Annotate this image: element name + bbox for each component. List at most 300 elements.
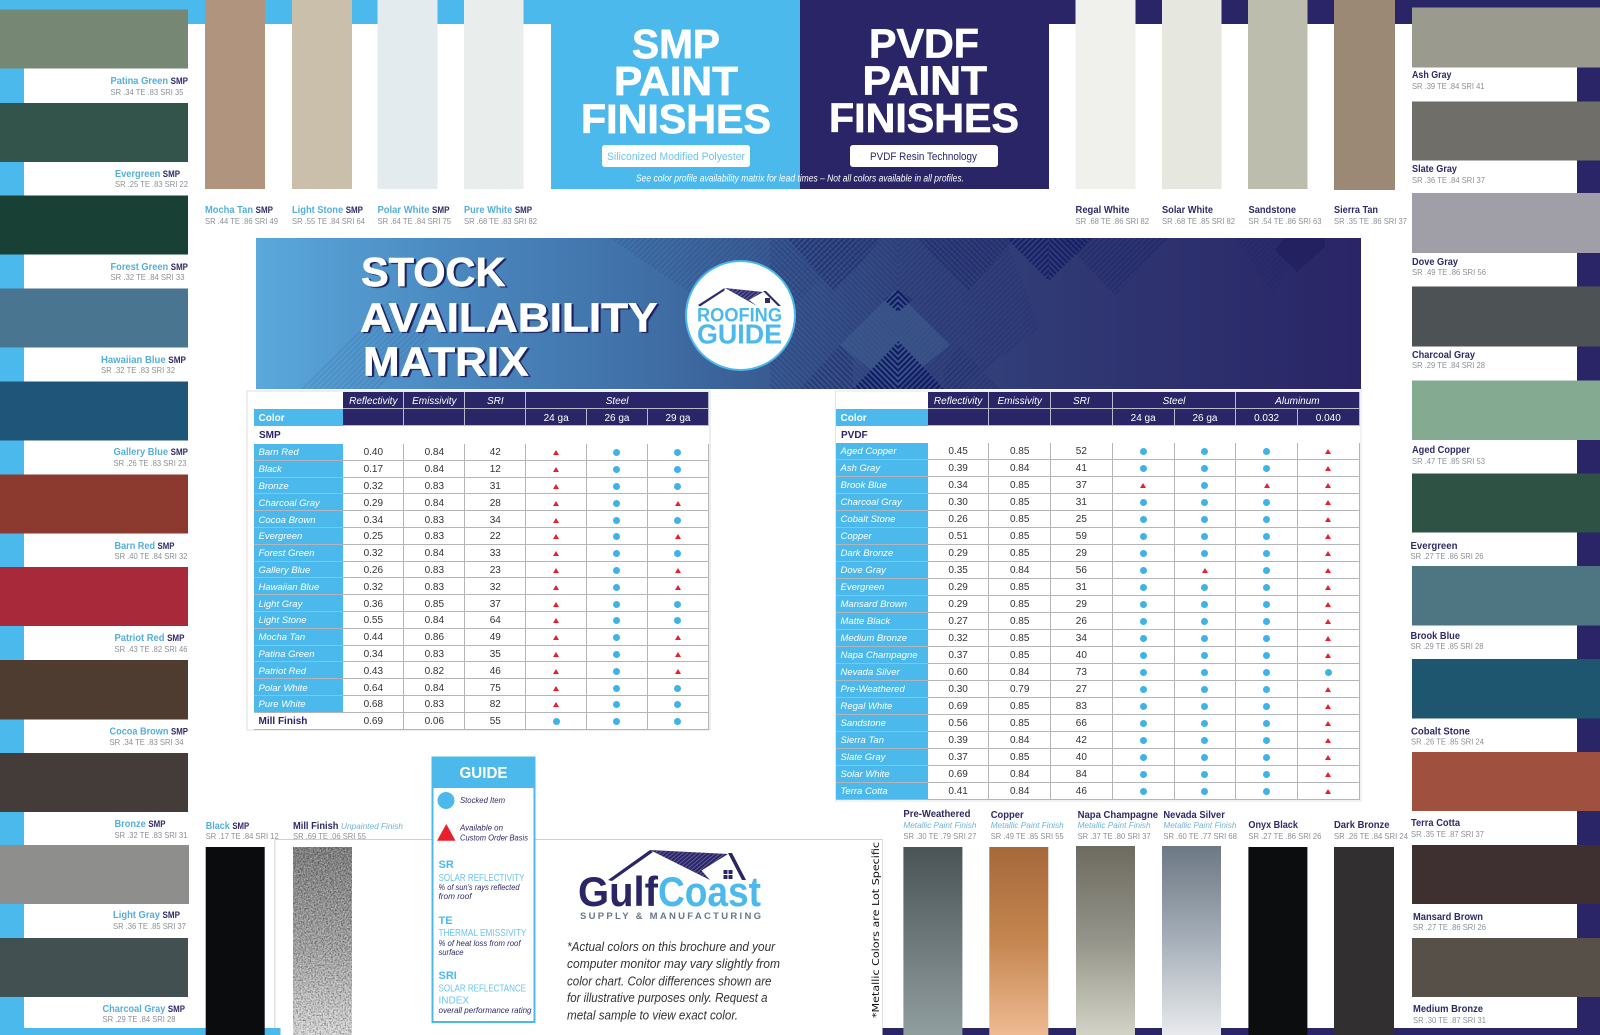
left swatch: Hawaiian Blue: Hawaiian Blue SMP <box>101 354 186 366</box>
row: Evergreen <box>254 528 709 545</box>
left swatch: Gallery Blue: Gallery Blue SMP <box>114 446 188 458</box>
row: Mill Finish <box>254 713 709 730</box>
bottom swatch: Black: SR .17 TE .84 SRI 12 <box>206 831 279 841</box>
row: Napa Champagne: 0.37 <box>948 650 968 661</box>
row: Charcoal Gray: 31 <box>1076 497 1087 508</box>
row: Evergreen: 0.29 <box>948 582 968 593</box>
row: Cocoa Brown: Cocoa Brown <box>258 515 316 526</box>
row: Pre-Weathered: 0.79 <box>1010 684 1029 695</box>
row: Regal White: 83 <box>1076 701 1087 712</box>
panel: SMP paint finishes heading <box>551 21 800 189</box>
right swatch: Aged Copper: SR .47 TE .85 SRI 53 <box>1412 456 1485 466</box>
row: Sandstone: 66 <box>1076 718 1087 729</box>
row: Mansard Brown: Mansard Brown <box>840 599 907 610</box>
legend: stocked item <box>438 792 505 809</box>
disclaimer: actual colors may vary: color chart. Color differences shown are <box>567 974 772 988</box>
top swatch: Sierra Tan <box>1334 0 1407 226</box>
row: Medium Bronze: 34 <box>1076 633 1087 644</box>
legend: custom order <box>437 824 528 842</box>
metallic swatch: Pre-Weathered: Metallic Paint Finish <box>903 820 977 830</box>
row: Patina Green: Patina Green <box>258 649 314 660</box>
top swatch: Solar White <box>1162 0 1235 226</box>
row: Light Stone: 0.55 <box>364 615 383 626</box>
table header: metrics: Emissivity <box>412 396 457 407</box>
row: Nevada Silver: 0.60 <box>948 667 968 678</box>
row: Barn Red: 0.84 <box>425 447 444 458</box>
row: Gallery Blue: 0.26 <box>364 565 383 576</box>
row: Hawaiian Blue: 32 <box>490 582 501 593</box>
disclaimer: actual colors may vary: metal sample to view exact color. <box>567 1008 738 1022</box>
bottom swatch: Black: Black SMP <box>206 820 249 832</box>
left swatch: Cocoa Brown <box>0 660 188 747</box>
metallic swatch: Copper <box>989 809 1064 1035</box>
disclaimer: actual colors may vary <box>567 939 780 1022</box>
row: Cobalt Stone: 25 <box>1076 514 1087 525</box>
row: Aged Copper: 0.85 <box>1010 446 1029 457</box>
row: Barn Red: Barn Red <box>258 447 299 458</box>
table header: gauges: 29 ga <box>665 413 690 424</box>
right swatch: Brook Blue <box>1410 566 1600 651</box>
metallic swatch: Napa Champagne: Napa Champagne <box>1078 809 1158 821</box>
row: Forest Green: 0.84 <box>425 548 444 559</box>
row: Charcoal Gray: 0.85 <box>1010 497 1029 508</box>
top swatch: Sandstone: SR .54 TE .86 SRI 63 <box>1248 216 1322 226</box>
row: Dove Gray: 0.35 <box>948 565 968 576</box>
background band: navy top and right <box>800 0 1600 1035</box>
right swatch: Aged Copper: Aged Copper <box>1412 444 1470 456</box>
left swatch: Patina Green: Patina Green SMP <box>110 75 188 87</box>
row: Copper: 0.85 <box>1010 531 1029 542</box>
row: Evergreen <box>836 579 1360 596</box>
panel: guide legend <box>432 756 536 1022</box>
row: Dark Bronze: 29 <box>1076 548 1087 559</box>
left swatch: Charcoal Gray: Charcoal Gray SMP <box>102 1003 185 1015</box>
right swatch: Slate Gray: Slate Gray <box>1412 163 1457 175</box>
panel: SMP paint finishes heading: SMP <box>632 21 720 67</box>
right swatch: Medium Bronze: Medium Bronze <box>1413 1003 1483 1015</box>
row: Polar White: 75 <box>490 683 501 694</box>
row: Napa Champagne: Napa Champagne <box>840 650 918 661</box>
row: Mansard Brown <box>836 596 1360 613</box>
row: Regal White: Regal White <box>840 701 892 712</box>
row: Patriot Red: 0.43 <box>364 666 383 677</box>
disclaimer: actual colors may vary: computer monitor may vary slightly from <box>567 956 780 971</box>
row: Slate Gray <box>836 749 1360 766</box>
table header: gauges: 24 ga <box>1131 413 1156 424</box>
right swatch: Terra Cotta <box>1411 752 1600 839</box>
row: Evergreen: 22 <box>490 531 501 542</box>
metallic swatch: Pre-Weathered: SR .30 TE .79 SRI 27 <box>903 831 977 841</box>
top swatch: Sandstone: Sandstone <box>1248 204 1296 216</box>
table header: metrics: SRI <box>487 396 504 407</box>
section label: PVDF: PVDF <box>841 430 868 441</box>
row: Mansard Brown: 0.85 <box>1010 599 1029 610</box>
table header: gauges: 24 ga <box>544 413 569 424</box>
legend: thermal emissivity: surface <box>438 948 464 957</box>
row: Hawaiian Blue: 0.83 <box>425 582 444 593</box>
row: Brook Blue: 37 <box>1076 480 1087 491</box>
right swatch: Dove Gray: Dove Gray <box>1412 256 1458 268</box>
row: Cobalt Stone: 0.85 <box>1010 514 1029 525</box>
top swatch: Polar White: Polar White SMP <box>378 204 450 216</box>
right swatch: Dove Gray: SR .49 TE .86 SRI 56 <box>1412 267 1486 277</box>
left swatch: Forest Green: Forest Green SMP <box>110 261 188 273</box>
top swatch: Pure White: Pure White SMP <box>464 204 532 216</box>
panel: guide legend: GUIDE <box>460 765 508 782</box>
row: Solar White <box>836 766 1360 783</box>
swatch: Dark Bronze <box>1334 819 1408 1035</box>
row: Brook Blue: 0.85 <box>1010 480 1029 491</box>
table header: metrics: SRI <box>1073 396 1090 407</box>
panel: PVDF paint finishes heading: PVDF <box>869 20 979 66</box>
table header: metrics: Steel <box>1163 396 1185 407</box>
row: Evergreen: 31 <box>1076 582 1087 593</box>
legend: solar reflectivity <box>438 859 525 901</box>
right swatch: Mansard Brown: Mansard Brown <box>1413 911 1483 923</box>
row: Polar White <box>254 679 709 696</box>
left swatch: Gallery Blue: SR .26 TE .83 SRI 23 <box>114 458 187 468</box>
row: Evergreen: Evergreen <box>840 582 884 593</box>
row: Bronze: 0.32 <box>364 481 383 492</box>
row: Sandstone: Sandstone <box>840 718 886 729</box>
row: Matte Black: Matte Black <box>840 616 890 627</box>
panel: PVDF paint finishes heading <box>800 20 1049 189</box>
left swatch: Charcoal Gray: SR .29 TE .84 SRI 28 <box>102 1014 176 1024</box>
table header: gauges: Color <box>840 413 867 424</box>
right swatch: Brook Blue: Brook Blue <box>1410 630 1460 642</box>
left swatch: Forest Green: SR .32 TE .84 SRI 33 <box>110 272 185 282</box>
left swatch: Bronze: Bronze SMP <box>114 818 166 830</box>
row: Polar White: 0.84 <box>425 683 444 694</box>
row: Cocoa Brown: 0.34 <box>364 515 383 526</box>
row: Light Gray <box>254 595 709 612</box>
row: Medium Bronze: 0.32 <box>948 633 968 644</box>
row: Pure White: Pure White <box>258 699 306 710</box>
left swatch: Patriot Red: Patriot Red SMP <box>114 632 184 644</box>
row: Napa Champagne: 40 <box>1076 650 1087 661</box>
icon: roofing guide badge <box>685 260 796 371</box>
row: Aged Copper <box>836 443 1360 460</box>
top swatch: Mocha Tan <box>205 0 278 226</box>
row: Cobalt Stone: 0.26 <box>948 514 968 525</box>
top swatch: Light Stone <box>292 0 365 226</box>
right swatch: Cobalt Stone <box>1411 659 1600 746</box>
row: Sierra Tan: Sierra Tan <box>840 735 884 746</box>
top swatch: Sandstone <box>1248 0 1322 226</box>
row: Aged Copper: Aged Copper <box>840 446 896 457</box>
row: Charcoal Gray: 0.30 <box>948 497 968 508</box>
row: Black: Black <box>258 464 282 475</box>
row: Mocha Tan: 0.44 <box>364 632 383 643</box>
swatch: Dark Bronze: Dark Bronze <box>1334 819 1390 831</box>
row: Hawaiian Blue: Hawaiian Blue <box>258 582 319 593</box>
top swatch: Polar White <box>378 0 451 226</box>
row: Regal White: 0.85 <box>1010 701 1029 712</box>
left swatch: Bronze: SR .32 TE .83 SRI 31 <box>114 830 188 840</box>
row: Terra Cotta: Terra Cotta <box>840 786 888 797</box>
row: Mocha Tan: 49 <box>490 632 501 643</box>
row: Patriot Red: 46 <box>490 666 501 677</box>
row: Medium Bronze: 0.85 <box>1010 633 1029 644</box>
legend: solar reflectance index <box>438 970 532 1015</box>
row: Charcoal Gray: 28 <box>490 498 501 509</box>
logo: Gulf Coast Supply and Manufacturing: SUPPLY & MANUFACTURING <box>580 911 761 922</box>
row: Matte Black: 26 <box>1076 616 1087 627</box>
swatch: Dark Bronze: SR .26 TE .84 SRI 24 <box>1334 831 1408 841</box>
row: Light Stone: 64 <box>490 615 501 626</box>
row: Copper: 59 <box>1076 531 1087 542</box>
row: Copper: Copper <box>840 531 872 542</box>
banner title: STOCK <box>361 249 506 295</box>
right swatch: Cobalt Stone: Cobalt Stone <box>1411 726 1470 738</box>
panel: SMP paint finishes heading: FINISHES <box>581 96 771 142</box>
metallic swatch: Napa Champagne <box>1076 809 1158 1035</box>
legend: solar reflectivity: % of sun's rays reflected <box>438 883 520 892</box>
row: Charcoal Gray: Charcoal Gray <box>840 497 902 508</box>
row: Terra Cotta: 0.84 <box>1010 786 1029 797</box>
right swatch: Slate Gray: SR .36 TE .84 SRI 37 <box>1412 175 1485 185</box>
table header: gauges: Color <box>258 413 285 424</box>
table header: gauges: 0.032 <box>1254 413 1279 424</box>
right swatch: Mansard Brown: SR .27 TE .86 SRI 26 <box>1413 922 1486 932</box>
row: Dove Gray: Dove Gray <box>840 565 886 576</box>
metallic swatch: Pre-Weathered: Pre-Weathered <box>903 808 970 820</box>
row: Bronze: 0.83 <box>425 481 444 492</box>
row: Charcoal Gray <box>836 494 1360 511</box>
metallic swatch: Copper: SR .49 TE .85 SRI 55 <box>991 831 1064 841</box>
row: Sierra Tan: 0.84 <box>1010 735 1029 746</box>
row: Solar White: Solar White <box>840 769 890 780</box>
table header: gauges <box>836 409 1360 426</box>
row: Mansard Brown: 0.29 <box>948 599 968 610</box>
row: Light Gray: Light Gray <box>258 599 302 610</box>
left swatch: Light Gray: SR .36 TE .85 SRI 37 <box>113 921 186 931</box>
row: Dove Gray <box>836 562 1360 579</box>
row: Sandstone <box>836 715 1360 732</box>
row: Copper <box>836 528 1360 545</box>
table header: gauges: 26 ga <box>1192 413 1217 424</box>
right swatch: Mansard Brown <box>1412 845 1600 932</box>
top swatch: Regal White: Regal White <box>1076 204 1130 216</box>
left swatch: Barn Red <box>0 474 188 561</box>
table: SMP stock availability <box>254 392 709 730</box>
top swatch: Sierra Tan: Sierra Tan <box>1334 204 1378 216</box>
row: Gallery Blue <box>254 562 709 578</box>
row: Forest Green: 33 <box>490 548 501 559</box>
row: Cocoa Brown: 34 <box>490 515 501 526</box>
row: Dove Gray: 0.84 <box>1010 565 1029 576</box>
row: Dark Bronze: 0.85 <box>1010 548 1029 559</box>
row: Charcoal Gray: 0.84 <box>425 498 444 509</box>
row: Ash Gray: Ash Gray <box>840 463 880 474</box>
logo: Gulf Coast Supply and Manufacturing: Gulf <box>578 868 659 915</box>
row: Aged Copper: 52 <box>1076 446 1087 457</box>
row: Black: 0.17 <box>364 464 383 475</box>
row: Sierra Tan: 0.39 <box>948 735 968 746</box>
legend: solar reflectivity: SOLAR REFLECTIVITY <box>438 873 525 884</box>
row: Mocha Tan: 0.86 <box>425 632 444 643</box>
row: Bronze <box>254 478 709 494</box>
metallic swatch: Nevada Silver <box>1162 809 1237 1035</box>
table header: metrics: Reflectivity <box>934 396 982 407</box>
row: Dark Bronze: 0.29 <box>948 548 968 559</box>
left swatch: Hawaiian Blue <box>0 288 188 375</box>
left swatch: Forest Green <box>0 196 188 282</box>
row: Gallery Blue: 23 <box>490 565 501 576</box>
row: Nevada Silver: 0.84 <box>1010 667 1029 678</box>
row: Solar White: 0.69 <box>948 769 968 780</box>
top swatch: Solar White: Solar White <box>1162 204 1213 216</box>
top swatch: Light Stone: SR .55 TE .84 SRI 64 <box>292 216 365 226</box>
panel: PVDF paint finishes heading: PAINT <box>862 58 987 104</box>
left swatch: Gallery Blue <box>0 382 188 468</box>
row: Light Stone: 0.84 <box>425 615 444 626</box>
row: Terra Cotta: 46 <box>1076 786 1087 797</box>
legend: thermal emissivity <box>438 915 527 957</box>
row: Patina Green: 0.34 <box>364 649 383 660</box>
row: Patina Green: 0.83 <box>425 649 444 660</box>
row: Dark Bronze <box>836 545 1360 562</box>
row: Pre-Weathered: 27 <box>1076 684 1087 695</box>
note: metallic colors are lot specific: *Metallic Colors are Lot Specific <box>871 842 882 1018</box>
top swatch: Pure White <box>464 0 537 226</box>
row: Nevada Silver <box>836 664 1360 681</box>
row: Solar White: 0.84 <box>1010 769 1029 780</box>
metallic swatch: Napa Champagne: Metallic Paint Finish <box>1078 820 1151 830</box>
bottom swatch: Mill Finish: SR .69 TE .06 SRI 55 <box>293 831 366 841</box>
row: Forest Green: 0.32 <box>364 548 383 559</box>
row: Dove Gray: 56 <box>1076 565 1087 576</box>
left swatch: Evergreen <box>0 103 188 189</box>
row: Terra Cotta: 0.41 <box>948 786 968 797</box>
right swatch: Slate Gray <box>1412 102 1600 185</box>
row: Cobalt Stone <box>836 511 1360 528</box>
left swatch: Patriot Red: SR .43 TE .82 SRI 46 <box>114 644 188 654</box>
row: Mocha Tan <box>254 629 709 646</box>
panel: PVDF paint finishes heading: PVDF Resin Technology <box>870 151 977 163</box>
right swatch: Medium Bronze: SR .30 TE .87 SRI 31 <box>1413 1015 1486 1025</box>
bottom swatch: Mill Finish: Unpainted Finish <box>341 821 403 831</box>
row: Brook Blue <box>836 477 1360 494</box>
left swatch: Hawaiian Blue: SR .32 TE .83 SRI 32 <box>101 365 175 375</box>
legend: stocked item: Stocked Item <box>460 796 505 805</box>
legend: solar reflectance index: overall performance rating <box>438 1006 532 1015</box>
row: Charcoal Gray: 0.29 <box>364 498 383 509</box>
row: Brook Blue: 0.34 <box>948 480 968 491</box>
right swatch: Charcoal Gray: SR .29 TE .84 SRI 28 <box>1412 360 1485 370</box>
icon: roofing guide badge: GUIDE <box>697 318 782 350</box>
table header: metrics <box>928 392 1360 409</box>
row: Pure White: 0.68 <box>364 699 383 710</box>
row: Light Gray: 0.36 <box>364 599 383 610</box>
top swatch: Sierra Tan: SR .35 TE .86 SRI 37 <box>1334 216 1407 226</box>
right swatch: Ash Gray: Ash Gray <box>1412 69 1452 81</box>
bottom swatch: Mill Finish: Mill Finish <box>293 820 338 832</box>
row: Forest Green <box>254 545 709 562</box>
left swatch: Cocoa Brown: Cocoa Brown SMP <box>110 726 188 738</box>
frame line: PVDF table outline <box>836 391 1361 801</box>
section label: SMP: SMP <box>259 430 281 441</box>
legend: solar reflectivity: from roof <box>438 892 472 901</box>
row: Evergreen: Evergreen <box>258 531 302 542</box>
top swatch: Light Stone: Light Stone SMP <box>292 204 363 216</box>
right swatch: Charcoal Gray: Charcoal Gray <box>1412 349 1475 361</box>
row: Dark Bronze: Dark Bronze <box>840 548 893 559</box>
note: lead times: See color profile availability matrix for lead times – Not all colors available in all profiles. <box>636 174 964 184</box>
row: Ash Gray: 0.39 <box>948 463 968 474</box>
row: Matte Black: 0.27 <box>948 616 968 627</box>
row: Charcoal Gray <box>254 494 709 511</box>
frame line: SMP table outline <box>247 391 710 730</box>
panel: SMP paint finishes heading: PAINT <box>614 58 738 104</box>
right swatch: Evergreen: Evergreen <box>1410 540 1458 552</box>
metallic swatch: Nevada Silver: Metallic Paint Finish <box>1163 820 1237 830</box>
row: Patina Green <box>254 646 709 662</box>
left swatch: Evergreen: Evergreen SMP <box>115 168 180 180</box>
top swatch: Mocha Tan: SR .44 TE .86 SRI 49 <box>205 216 278 226</box>
row: Ash Gray <box>836 460 1360 477</box>
banner title <box>360 249 658 384</box>
legend: custom order: Custom Order Basis <box>460 834 528 842</box>
legend: thermal emissivity: THERMAL EMISSIVITY <box>438 928 527 939</box>
row: Polar White: 0.64 <box>364 683 383 694</box>
left swatch: Patina Green: SR .34 TE .83 SRI 35 <box>110 87 184 97</box>
row: Slate Gray: 0.85 <box>1010 752 1029 763</box>
row: Sierra Tan <box>836 732 1360 749</box>
row: Slate Gray: 0.37 <box>948 752 968 763</box>
row: Mocha Tan: Mocha Tan <box>258 632 305 643</box>
right swatch: Cobalt Stone: SR .26 TE .85 SRI 24 <box>1411 736 1484 746</box>
legend: custom order: Available on <box>459 824 504 832</box>
row: Pre-Weathered: Pre-Weathered <box>840 684 905 695</box>
left swatch: Bronze <box>0 753 188 840</box>
row: Sandstone: 0.56 <box>948 718 968 729</box>
row: Black <box>254 461 709 478</box>
row: Mill Finish: Mill Finish <box>258 716 307 727</box>
icon: roofing guide badge: ROOFING <box>697 306 782 326</box>
banner title: AVAILABILITY <box>360 294 658 340</box>
row: Light Stone <box>254 612 709 629</box>
left swatch: Light Gray <box>0 845 189 931</box>
row: Evergreen: 0.83 <box>425 531 444 542</box>
row: Barn Red <box>254 444 709 461</box>
metallic swatch: Napa Champagne: SR .37 TE .80 SRI 37 <box>1078 831 1151 841</box>
row: Mill Finish: 0.69 <box>364 716 383 727</box>
row: Forest Green: Forest Green <box>258 548 314 559</box>
table header: gauges <box>254 409 709 426</box>
row: Regal White: 0.69 <box>948 701 968 712</box>
table: PVDF stock availability <box>836 392 1360 800</box>
row: Pure White: 82 <box>490 699 501 710</box>
row: Bronze: 31 <box>490 481 501 492</box>
row: Slate Gray: 40 <box>1076 752 1087 763</box>
metallic swatch: Nevada Silver: SR .60 TE .77 SRI 68 <box>1163 831 1237 841</box>
table header: metrics: Aluminum <box>1275 396 1320 407</box>
right swatch: Evergreen <box>1410 474 1600 561</box>
row: Gallery Blue: Gallery Blue <box>258 565 310 576</box>
row: Charcoal Gray: Charcoal Gray <box>258 498 320 509</box>
row: Napa Champagne <box>836 647 1360 664</box>
row: Mansard Brown: 29 <box>1076 599 1087 610</box>
row: Cocoa Brown <box>254 511 709 528</box>
metallic swatch: Pre-Weathered <box>903 808 977 1035</box>
legend: solar reflectance index: INDEX <box>438 996 469 1006</box>
row: Ash Gray: 0.84 <box>1010 463 1029 474</box>
row: Medium Bronze <box>836 630 1360 647</box>
background band: blue top and left <box>0 0 800 1035</box>
row: Matte Black: 0.85 <box>1010 616 1029 627</box>
table header: metrics: Emissivity <box>997 396 1042 407</box>
